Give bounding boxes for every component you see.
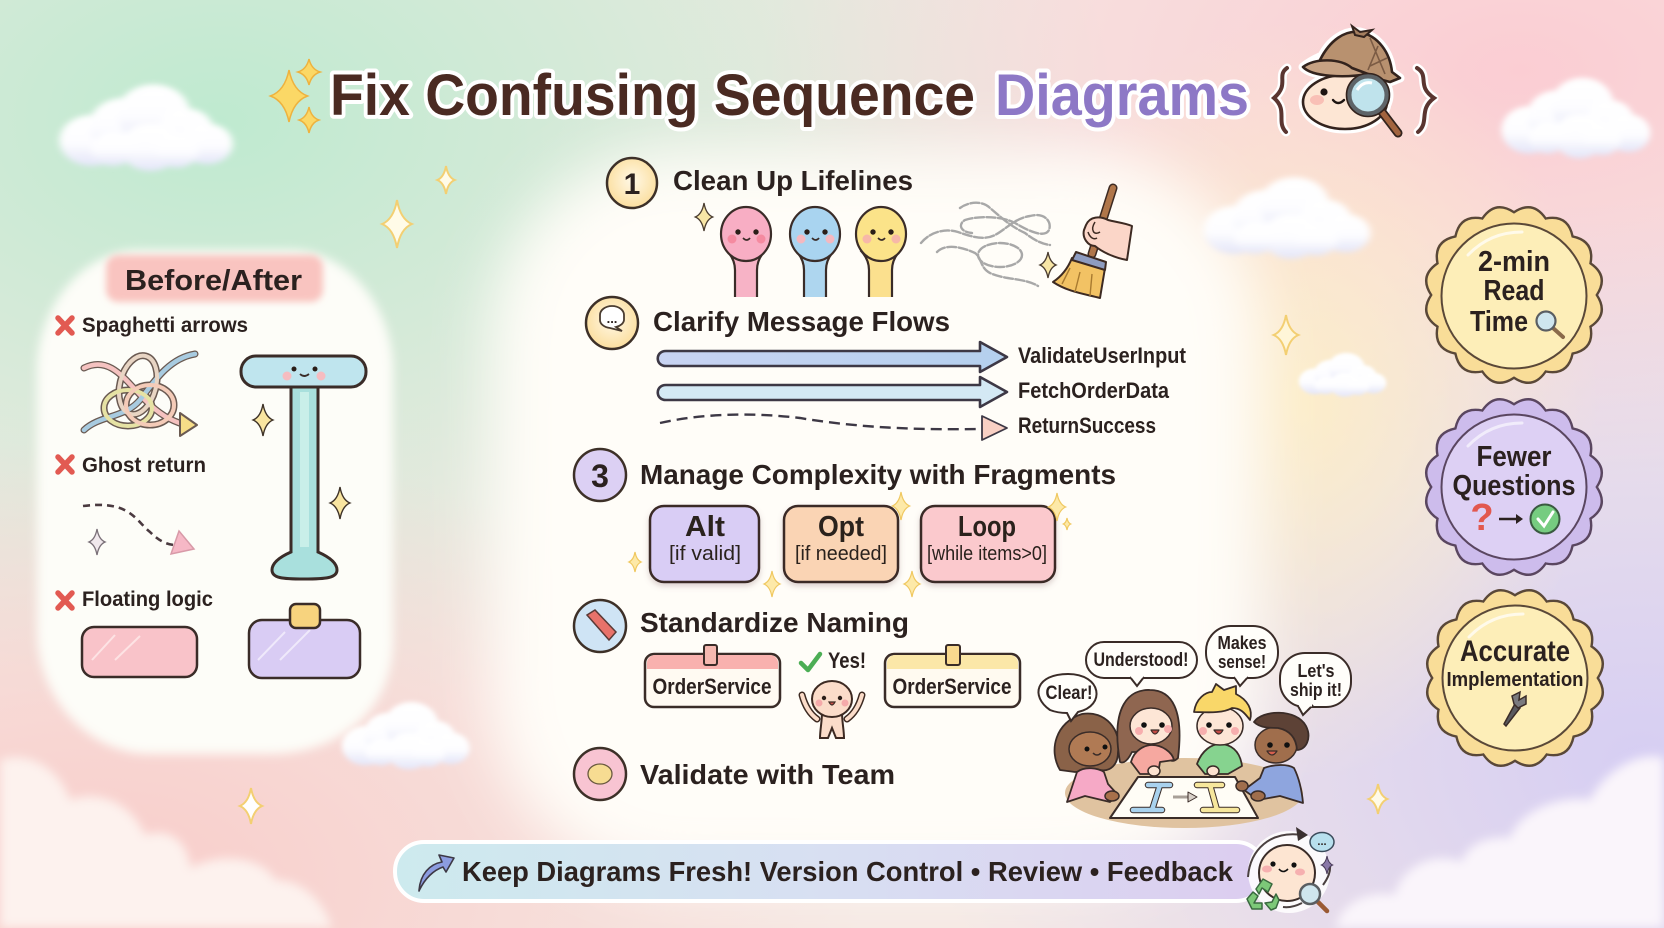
step 4: standardize naming (574, 600, 1020, 738)
step 2: clarify message flows (586, 297, 1187, 440)
scribble lines (921, 203, 1050, 286)
illustration: clean lifeline (241, 356, 366, 579)
name box: pink (645, 645, 780, 707)
name box: pink: OrderService (652, 674, 772, 699)
cloud: middle right (1204, 177, 1370, 259)
badge: accurate implementation: Accurate (1460, 635, 1570, 668)
icon: question to check: ? (1470, 497, 1494, 539)
speech bubble: makes sense: Makes (1218, 633, 1266, 653)
label: return success: ReturnSuccess (1018, 413, 1156, 438)
speech bubble: clear: Clear! (1046, 683, 1092, 704)
banner text: Keep Diagrams Fresh! Version Control • Review • Feedback (462, 856, 1233, 887)
speech bubble: ship it (1280, 653, 1351, 715)
icon: wrench (1504, 692, 1526, 726)
arrow: fetch order data (658, 377, 1007, 407)
fragment: opt: [if needed] (795, 543, 887, 565)
heading: validate with team: Validate with Team (640, 759, 895, 790)
badge: 2-min read time: Time (1470, 306, 1528, 338)
icon: broom and hand (1053, 188, 1132, 298)
fragment: alt: [if valid] (669, 543, 741, 565)
lifeline: yellow (856, 207, 906, 297)
yes check (801, 648, 866, 673)
icon: number 3 (574, 449, 626, 501)
center glow panel (490, 150, 1260, 880)
fragment: loop: Loop (958, 511, 1016, 543)
cloud: top right (1501, 78, 1650, 158)
bottom right cloud bank (1336, 756, 1664, 928)
heading: before/after (106, 255, 323, 302)
badge: fewer questions (1426, 399, 1602, 575)
icon: number 3: 3 (591, 458, 609, 494)
speech bubble: makes sense: sense! (1218, 652, 1266, 672)
kid: curly hair (1055, 713, 1119, 802)
heading: standardize naming: Standardize Naming (640, 607, 909, 638)
paper diagram (1110, 777, 1258, 818)
icon: swoosh arrow (419, 855, 454, 891)
icon: team glyph (574, 748, 626, 800)
speech bubble: ship it: ship it! (1290, 680, 1342, 700)
icon: eraser (574, 600, 626, 652)
label: ghost return: Ghost return (82, 454, 206, 477)
speech bubble: clear (1038, 674, 1097, 721)
icon: speech bubble (586, 297, 638, 349)
icon: ghost arrow (83, 505, 194, 555)
icon: detective mascot with braces (1274, 26, 1434, 133)
table (1065, 758, 1303, 828)
heading: manage complexity: Manage Complexity with Fragments (640, 459, 1116, 490)
fragment: opt: Opt (818, 511, 864, 543)
fragment: alt (650, 506, 759, 582)
heading: clarify message flows: Clarify Message Flows (653, 306, 950, 337)
heading: before/after: Before/After (125, 265, 302, 297)
arrow: return success (660, 415, 1007, 440)
arrow: validate user input (658, 342, 1007, 372)
step 3: manage complexity with fragments (574, 449, 1116, 597)
speech bubble: ship it: Let's (1298, 661, 1334, 681)
illustration: team around table (1055, 684, 1308, 828)
badge: 2-min read time: Read (1484, 275, 1544, 307)
icon: sparkle (1040, 252, 1056, 278)
icon: sparkle (695, 203, 713, 231)
kid: long brown hair (1117, 690, 1180, 774)
label: floating logic: Floating logic (82, 588, 213, 611)
badge: accurate implementation: Implementation (1446, 669, 1584, 691)
icon: magnifier (1536, 312, 1563, 337)
step 1: clean up lifelines (607, 158, 1132, 298)
title: Fix Confusing Sequence (330, 63, 975, 128)
icon: tangled arrows (84, 351, 197, 436)
cloud: small right (1299, 353, 1386, 397)
icon: question to check (1470, 497, 1560, 539)
decorative sparkles (240, 166, 1387, 824)
title sparkles (270, 59, 320, 133)
title: Diagrams (995, 63, 1249, 128)
sparkles: lifeline (253, 404, 350, 519)
badge: 2-min read time: 2-min (1478, 246, 1550, 278)
yes check: Yes! (828, 648, 866, 673)
fragment: loop: [while items>0] (927, 543, 1047, 565)
bottom left cloud bank (0, 757, 332, 928)
kid: short dark hair (1244, 713, 1308, 803)
label: fetch order data: FetchOrderData (1018, 378, 1170, 403)
icon: recycling mascot: ... (1317, 836, 1327, 848)
banner: keep diagrams fresh (395, 842, 1265, 901)
badge: 2-min read time (1426, 207, 1602, 383)
icon: number 1 (607, 158, 657, 208)
badge: fewer questions: Questions (1452, 470, 1576, 502)
sparkles: fragments (629, 492, 1071, 597)
panel: before/after (37, 250, 393, 754)
fragment: loop (921, 506, 1055, 582)
fragment: floating pink box (82, 627, 197, 677)
speech bubble: makes sense (1206, 626, 1278, 686)
kid: blonde hair (1194, 684, 1251, 774)
fragment: opt (784, 506, 898, 582)
step 5: validate with team (574, 748, 895, 800)
icon: recycling mascot (1247, 827, 1334, 913)
label: spaghetti arrows: Spaghetti arrows (82, 314, 248, 337)
speech bubble: understood: Understood! (1094, 650, 1188, 671)
fragment: alt: Alt (685, 511, 725, 543)
icon: speech bubble: ... (607, 311, 617, 326)
name box: yellow: OrderService (892, 674, 1012, 699)
character: happy mascot (802, 681, 862, 738)
lifeline: blue (790, 207, 840, 297)
cloud: small lower left (342, 702, 470, 769)
icon: recycling symbol (1247, 879, 1279, 910)
name box: yellow (885, 645, 1020, 707)
icon: number 1: 1 (624, 168, 640, 201)
heading: clean up lifelines: Clean Up Lifelines (673, 165, 913, 196)
lifeline: pink (721, 207, 771, 297)
fragment: anchored purple box (249, 604, 360, 678)
badge: fewer questions: Fewer (1476, 441, 1552, 473)
label: validate user input: ValidateUserInput (1018, 343, 1187, 368)
hands (1105, 766, 1265, 801)
speech bubble: understood (1086, 642, 1197, 686)
cloud: top left (59, 84, 233, 171)
badge: accurate implementation (1427, 590, 1603, 766)
